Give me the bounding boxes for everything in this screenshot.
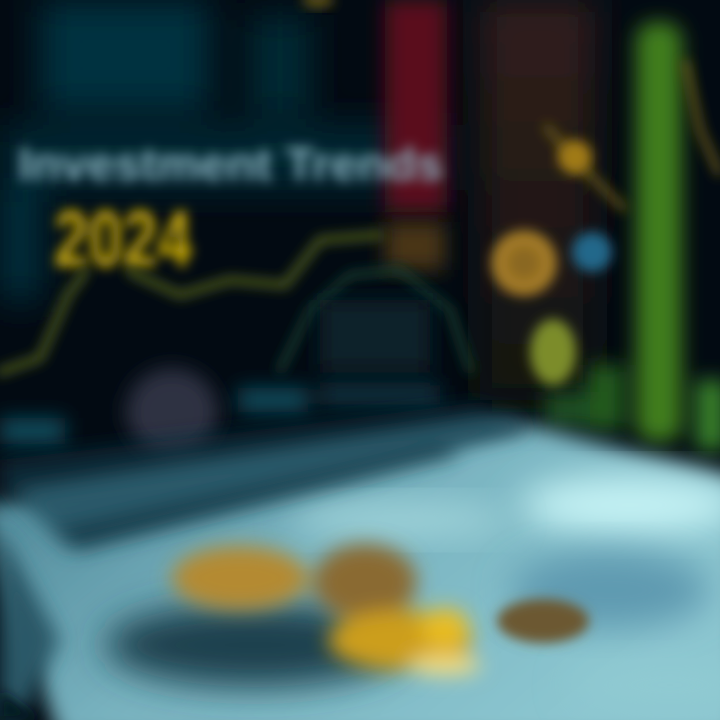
- keyboard: [0, 405, 530, 550]
- title: Investment Trends: [18, 138, 443, 190]
- line chart: [0, 235, 470, 372]
- top gold spot: [302, 0, 334, 8]
- brown bar: [385, 222, 445, 270]
- single coin: [497, 599, 589, 643]
- coin icon: green: [530, 319, 576, 385]
- red bar: [385, 0, 447, 212]
- coin shadow: [105, 603, 405, 687]
- paper sheet: [0, 425, 720, 720]
- coin icon: blue: [572, 232, 612, 272]
- small chart bars: [0, 300, 440, 444]
- coin pile: [172, 544, 481, 675]
- trend line: [545, 60, 720, 210]
- coin icon: small gold: [558, 140, 592, 174]
- green bars: [545, 22, 720, 450]
- screen glow panels: [0, 0, 595, 400]
- year label: 2024: [54, 194, 192, 283]
- coin icon: gold ring: [491, 230, 557, 296]
- dome icon: [126, 368, 218, 456]
